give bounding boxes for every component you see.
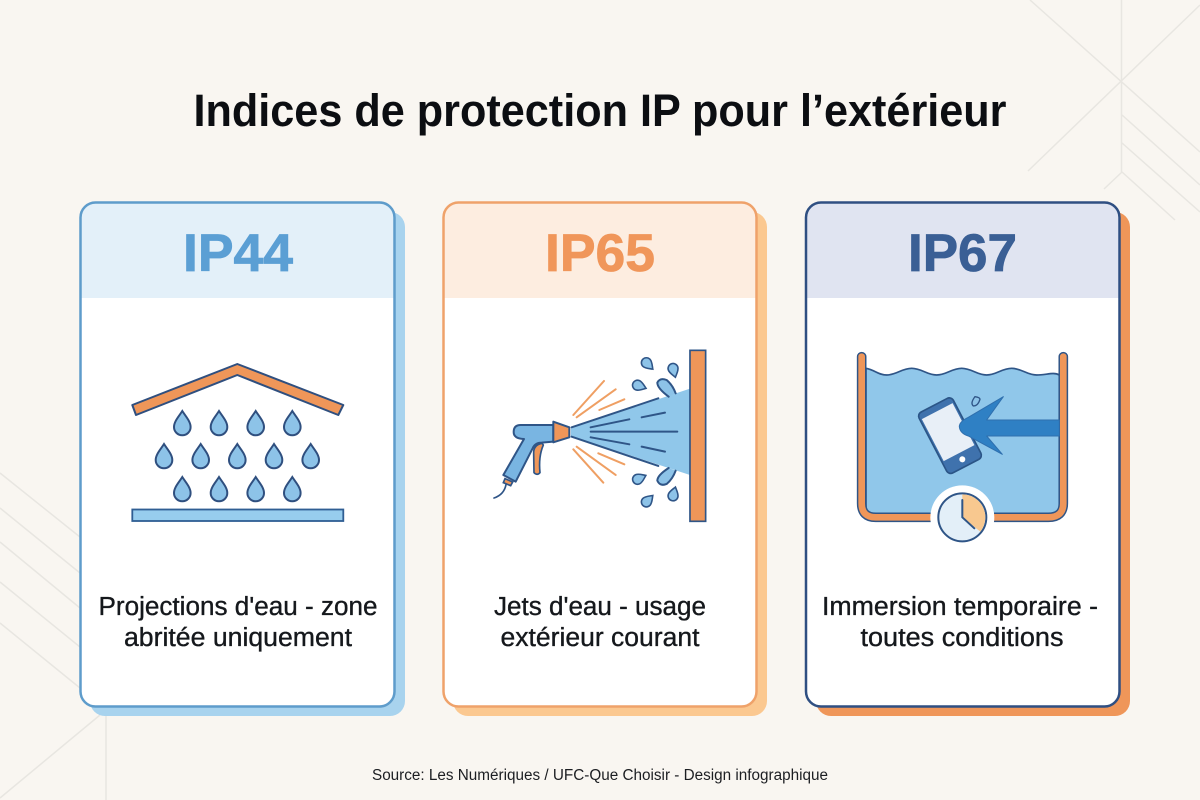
source note: Source: Les Numériques / UFC-Que Choisir - Design infographique [372,767,828,784]
text: IP65 description: extérieur courant [500,624,700,652]
heading: IP44: IP44 [183,224,294,283]
title: Indices de protection IP pour l’extérieur [194,85,1006,136]
panel: IP44 [80,202,405,716]
text: IP44 description: abritée uniquement [124,624,352,652]
icon: spray gun hitting wall [494,350,706,521]
panel: IP67 [806,202,1130,716]
panel: IP65 [444,202,767,716]
text: IP65 description: Jets d'eau - usage [494,593,706,621]
icon: roof with water drops [132,364,343,521]
heading: IP65: IP65 [545,224,655,283]
text: IP67 description: toutes conditions [860,624,1064,652]
text: IP44 description: Projections d'eau - zone [98,593,378,621]
text: IP67 description: Immersion temporaire - [822,593,1098,621]
icon: phone immersed in water with clock [862,357,1063,549]
heading: IP67: IP67 [908,224,1017,283]
